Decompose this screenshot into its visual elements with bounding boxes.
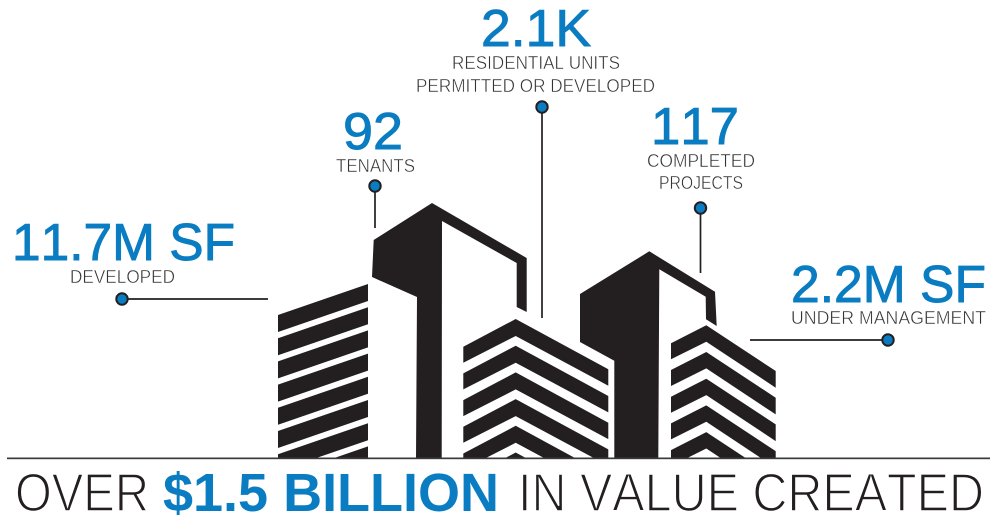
stat: 2.2M SF under management: UNDER MANAGEMENT bbox=[791, 307, 986, 328]
stat: 11.7M SF developed: DEVELOPED bbox=[70, 266, 175, 287]
stat: 2.2M SF under management bbox=[750, 256, 986, 346]
stat: 2.1K residential units: RESIDENTIAL UNITS bbox=[452, 52, 620, 73]
building: first tower bbox=[372, 203, 527, 458]
stat: 11.7M SF developed: 11.7M SF bbox=[12, 214, 235, 272]
stat: 2.1K residential units: 2.1K bbox=[481, 0, 591, 58]
stat: 92 tenants: 92 bbox=[343, 103, 403, 161]
building: middle chevron facade bbox=[463, 319, 608, 458]
stat: 117 completed projects bbox=[647, 98, 755, 273]
stat: 2.2M SF under management: 2.2M SF bbox=[791, 256, 986, 314]
headline: over $1.5 billion in value created: OVER bbox=[15, 463, 149, 523]
stat: 92 tenants bbox=[336, 103, 415, 228]
headline: over $1.5 billion in value created: $1.5 BILLION bbox=[163, 463, 499, 523]
stat: 117 completed projects: PROJECTS bbox=[659, 172, 743, 193]
building: right chevron facade bbox=[671, 325, 776, 458]
stat: 11.7M SF developed bbox=[12, 214, 268, 305]
stat: 117 completed projects: 117 bbox=[651, 98, 739, 156]
stat: 117 completed projects: COMPLETED bbox=[647, 150, 755, 171]
stat: 2.1K residential units bbox=[416, 0, 655, 318]
stat: 92 tenants: TENANTS bbox=[336, 155, 415, 176]
stat: 2.1K residential units: PERMITTED OR DEVELOPED bbox=[416, 75, 655, 96]
headline: over $1.5 billion in value created bbox=[15, 463, 984, 523]
illustration: city buildings bbox=[278, 203, 776, 458]
building: left striped facade bbox=[278, 284, 368, 458]
building: second tower bbox=[580, 251, 717, 458]
